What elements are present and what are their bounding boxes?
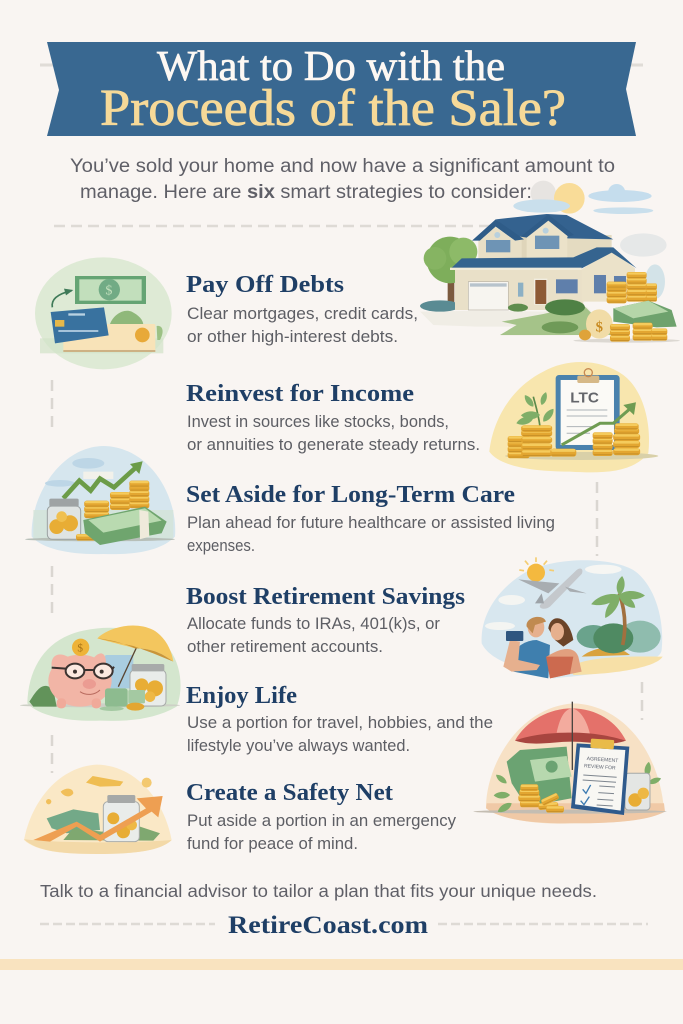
- body text: or other high-interest debts.: [187, 328, 398, 346]
- body text: [187, 305, 418, 346]
- body text: create a safety net: Put aside a portion in an emergency: [187, 812, 457, 830]
- item: set aside for long-term care: [25, 446, 555, 555]
- body text: Plan ahead for future healthcare or assisted living: [187, 514, 555, 532]
- illustration: card and wallet: $: [105, 284, 112, 299]
- heading: Boost Retirement Savings: [186, 584, 465, 610]
- right upper section: [567, 235, 612, 260]
- body text: create a safety net: fund for peace of mind.: [187, 835, 358, 853]
- illustration: piggy bank: [20, 625, 181, 721]
- illustration: umbrella and clipboard: [473, 702, 667, 824]
- body text: [187, 615, 440, 656]
- item: enjoy life: [20, 625, 493, 755]
- item: boost retirement savings: [186, 557, 663, 678]
- heading: Enjoy Life: [186, 683, 297, 709]
- illustration: card and wallet: [35, 257, 172, 369]
- illustration: jar and rising arrow: [24, 765, 172, 854]
- intro text: You’ve sold your home and now have a significant amount to: [70, 156, 615, 177]
- illustration: house with coins: [420, 181, 680, 343]
- intro text: [70, 156, 615, 203]
- heading: Set Aside for Long-Term Care: [186, 482, 515, 508]
- body text: Invest in sources like stocks, bonds,: [187, 413, 449, 431]
- illustration: umbrella and clipboard: AGREEMENT: [587, 756, 618, 764]
- body text: [187, 413, 480, 454]
- title line 2: Proceeds of the Sale?: [100, 80, 566, 137]
- body text: Clear mortgages, credit cards,: [187, 305, 418, 323]
- heading: Pay Off Debts: [186, 272, 344, 298]
- title banner: [40, 42, 643, 137]
- item: reinvest for income: [186, 362, 658, 472]
- illustration: jar, coins and cash: [25, 446, 175, 554]
- illustration: house with coins: $: [596, 320, 603, 336]
- body text: other retirement accounts.: [187, 638, 383, 656]
- body text: lifestyle you’ve always wanted.: [187, 737, 410, 755]
- title line 1: What to Do with the: [157, 44, 505, 90]
- illustration: piggy bank: $: [77, 643, 83, 655]
- body text: [187, 514, 555, 555]
- illustration: couple travelling: [482, 557, 663, 678]
- footer advice text: Talk to a financial advisor to tailor a plan that fits your unique needs.: [40, 881, 597, 901]
- body text: or annuities to generate steady returns.: [187, 436, 480, 454]
- body text: expenses.: [187, 537, 255, 555]
- illustration: LTC clipboard: [489, 362, 658, 472]
- heading: create a safety net: Create a Safety Net: [186, 780, 393, 806]
- illustration: umbrella and clipboard: REVIEW FOR: [584, 763, 616, 772]
- body text: Use a portion for travel, hobbies, and the: [187, 714, 493, 732]
- body text: Allocate funds to IRAs, 401(k)s, or: [187, 615, 440, 633]
- body text: create a safety net: [187, 812, 457, 853]
- website name: RetireCoast.com: [228, 912, 428, 939]
- intro text: manage. Here are six smart strategies to consider:: [80, 182, 532, 203]
- illustration: LTC clipboard: LTC: [570, 390, 599, 407]
- body text: [187, 714, 493, 755]
- heading: Reinvest for Income: [186, 381, 414, 407]
- item: pay off debts: [35, 257, 418, 369]
